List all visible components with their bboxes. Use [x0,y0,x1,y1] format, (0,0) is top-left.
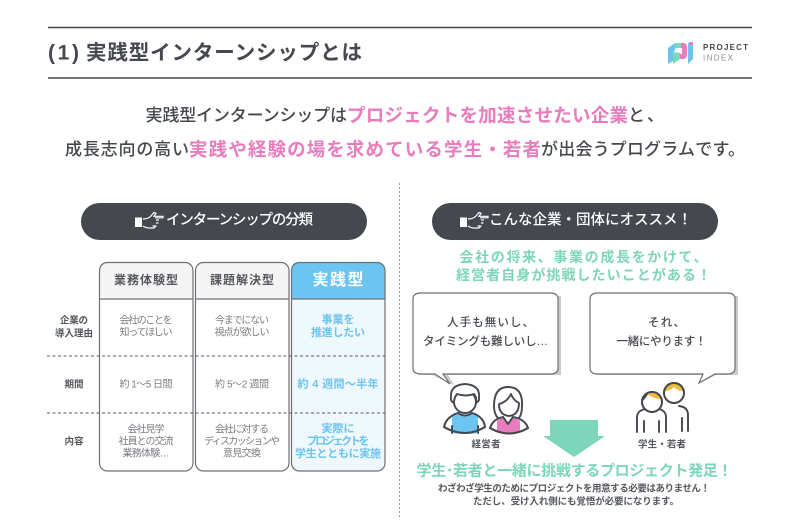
column: 課題解決型: ディスカッションや [204,434,280,448]
title: 実践型インターンシップとは [86,42,362,64]
intro text: が出会うプログラムです。 [541,139,745,159]
column: 実践型: 約 4 週間〜半年 [298,376,378,390]
speech bubble: left: 人手も無いし、 [447,315,534,329]
title: (1) [48,42,79,64]
intro text: 実践型インターンシップは [146,106,347,125]
heading: recommended: こんな企業・団体にオススメ！ [489,212,692,228]
row labels [55,314,93,448]
intro text: 成長志向の高い [65,140,189,159]
conclusion: わざわざ学生のためにプロジェクトを用意する必要はありません！ [438,482,710,494]
column: 実践型 [292,262,385,471]
green message: 経営者自身が挑戦したいことがある！ [456,267,711,283]
heading: classification: インターンシップの分類 [166,212,314,228]
logo: project index [668,42,748,64]
classification table [47,262,385,471]
speech bubble: right [590,293,738,384]
column: 課題解決型: 視点が欲しい [214,326,270,338]
intro text: プロジェクトを加速させたい企業 [347,105,628,126]
column: 業務体験型: 会社のことを [120,314,172,326]
conclusion: 学生･若者と一緒に挑戦するプロジェクト発足！ [416,462,732,480]
speech bubble: left [413,293,561,385]
column: 課題解決型: 今までにない [215,314,269,326]
column: 実践型: 実際に [322,421,354,435]
conclusion: ただし、受け入れ側にも覚悟が必要になります。 [473,496,679,508]
column: 課題解決型: 課題解決型 [210,272,274,287]
column: 課題解決型: 会社に対する [215,422,269,436]
logo: project index: PROJECT [703,43,748,52]
intro text: 実践や経験の場を求めている学生・若者 [189,139,541,160]
icon: managers [444,384,528,434]
column: 業務体験型 [99,262,193,471]
column: 課題解決型: 意見交換 [223,448,261,460]
column: 業務体験型: 社員との交流 [118,434,174,448]
green message: 会社の将来、事業の成長をかけて、 [460,249,708,265]
heading: classification [81,203,367,240]
speech bubble: right: それ、 [648,316,685,329]
conclusion [416,462,732,508]
speech bubble: left: タイミングも難しいし… [423,334,548,348]
column: 業務体験型: 知ってほしい [120,326,172,338]
column: 業務体験型: 会社見学 [128,422,164,436]
column: 実践型: 推進したい [311,325,365,339]
arrow [543,420,605,457]
icon: students [637,383,688,432]
speech bubble: right: 一緒にやります！ [616,334,706,348]
row labels: 期間 [64,378,84,390]
logo: project index: INDEX [703,54,734,62]
label: 学生・若者: 学生・若者 [638,438,686,450]
column: 実践型: プロジェクトを [306,434,370,448]
green message [456,249,711,283]
label: 経営者: 経営者 [472,438,501,450]
intro text: と、 [628,106,664,125]
row labels: 企業の [60,314,88,326]
column: 業務体験型: 業務体験… [122,446,170,460]
intro text [65,105,745,160]
column: 業務体験型: 業務体験型 [114,272,178,287]
column: 業務体験型: 約 1〜5 日間 [120,378,172,390]
column: 課題解決型: 約 5〜2 週間 [215,378,269,390]
column: 実践型: 学生とともに実施 [295,446,381,460]
column: 実践型: 実践型 [312,271,364,289]
column: 実践型: 事業を [322,312,354,326]
heading: recommended [432,203,718,240]
row labels: 内容 [64,436,84,448]
column: 課題解決型 [196,262,289,471]
row labels: 導入理由 [55,328,93,340]
